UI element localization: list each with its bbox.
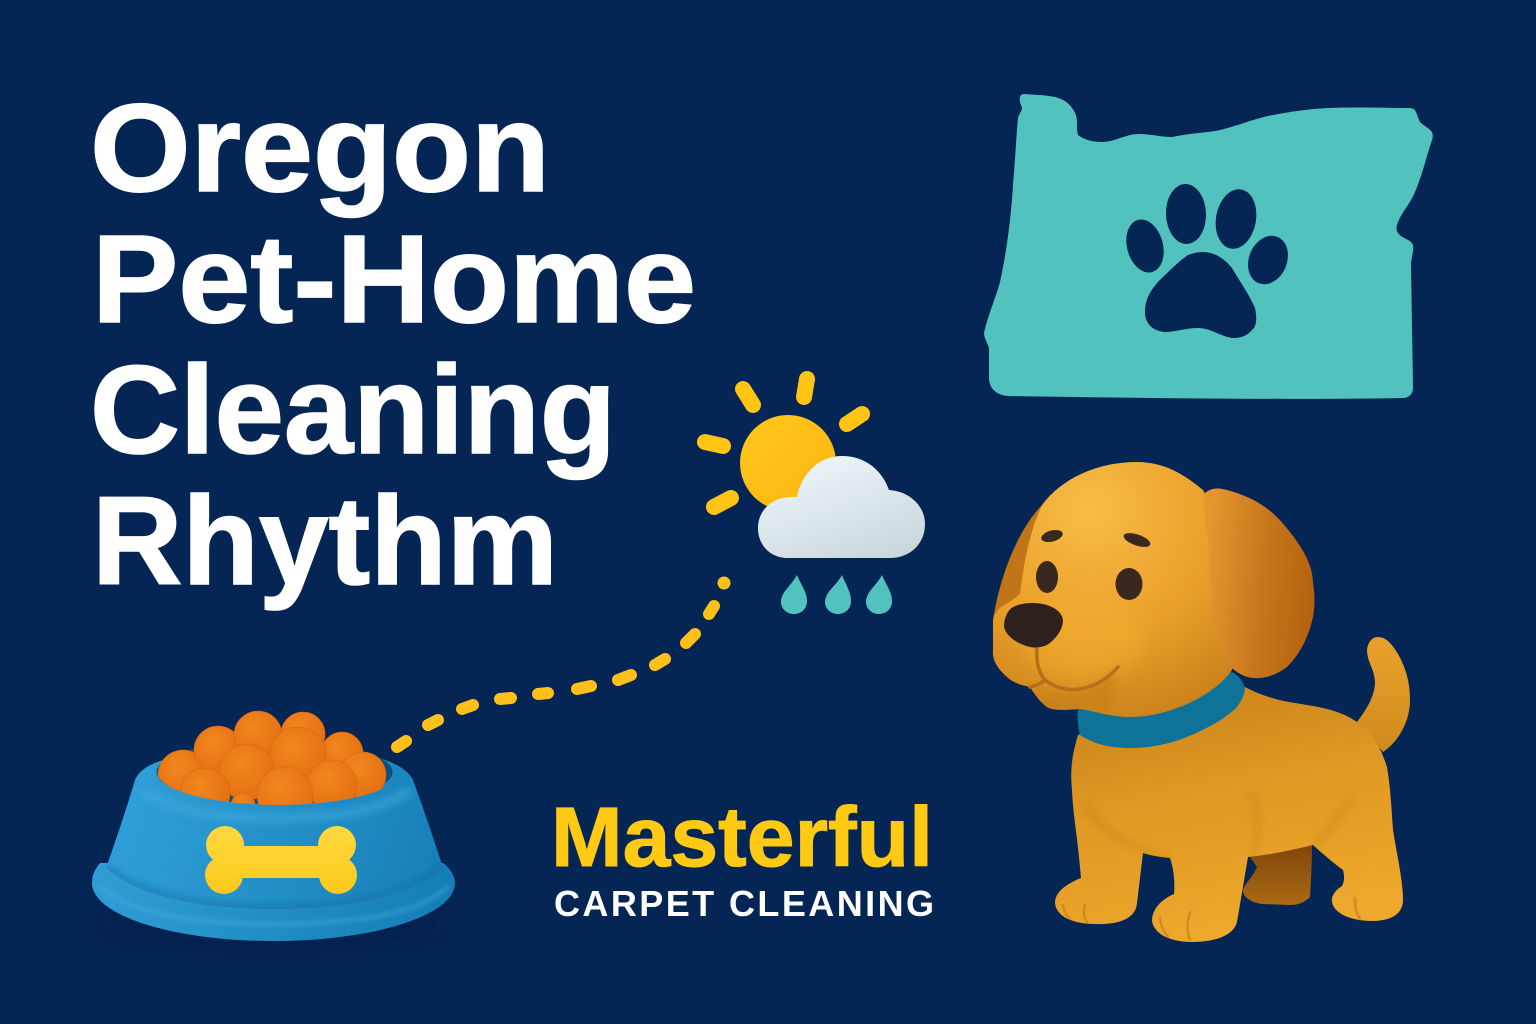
title: Pet-Home: [92, 210, 696, 349]
dashed path from bowl to weather: [397, 576, 730, 747]
bowl body: [106, 757, 443, 909]
sun disc: [740, 415, 836, 511]
bowl opening: [156, 740, 392, 804]
title: [90, 79, 696, 611]
eyebrows: [1040, 528, 1152, 550]
body creases: [1152, 816, 1340, 857]
logo: Masterful Carpet Cleaning: Masterful: [551, 790, 933, 884]
logo: Masterful Carpet Cleaning: [551, 790, 934, 924]
title: Cleaning: [90, 341, 616, 480]
muzzle shading: [1034, 641, 1130, 713]
right ear: [1204, 488, 1314, 678]
nose: [1004, 603, 1063, 648]
rain drops: [781, 575, 892, 614]
title: Rhythm: [92, 472, 558, 611]
mouth: [1030, 649, 1118, 690]
icon: dog bowl with kibble: [92, 711, 455, 942]
kibble: [158, 710, 386, 805]
head: [993, 462, 1234, 717]
toes: [1063, 898, 1360, 940]
body highlights: [106, 790, 443, 909]
icon: paw print: [1121, 183, 1295, 338]
icon: bone: [205, 826, 357, 894]
icon: sun, cloud and rain: [705, 379, 925, 614]
bowl shadow: [104, 902, 444, 942]
sun rays: [705, 379, 862, 507]
Oregon state map with paw cutout: [984, 94, 1433, 399]
tail: [1357, 637, 1410, 752]
infographic canvas: [92, 94, 1433, 942]
title: Oregon: [90, 79, 550, 218]
bowl base ring: [92, 863, 455, 941]
illustration: puppy: [993, 462, 1410, 942]
left ear: [993, 505, 1042, 620]
far hind leg: [1243, 845, 1312, 905]
eyes: [1036, 561, 1142, 600]
logo: Masterful Carpet Cleaning: CARPET CLEANING: [554, 883, 934, 924]
collar: [1078, 672, 1245, 748]
body and legs: [1055, 687, 1403, 942]
cloud: [758, 456, 925, 558]
base ring highlight: [100, 886, 448, 924]
